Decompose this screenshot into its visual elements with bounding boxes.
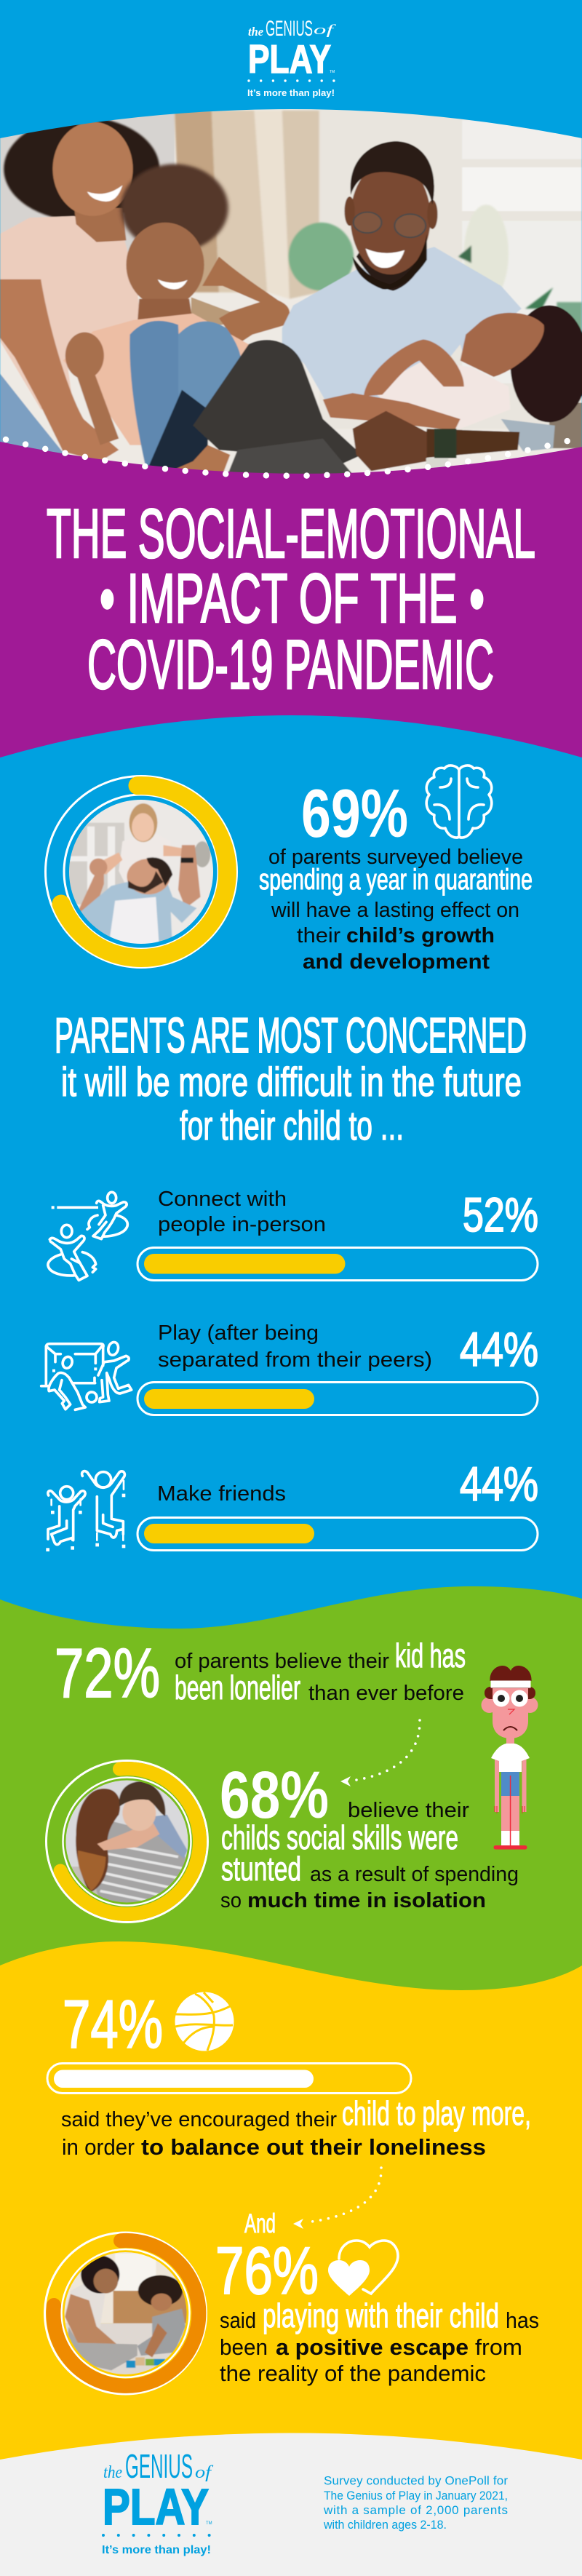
text block: 69% finding: will have a lasting effect on <box>271 899 519 922</box>
heading: parents are most concerned: for their child to ... <box>180 1102 404 1148</box>
logo: The Genius of Play header: the <box>248 25 263 39</box>
text block: 69% finding: their <box>297 924 340 947</box>
text block: 72% finding: kid has <box>395 1637 466 1674</box>
text block: 76% finding: has <box>506 2307 539 2333</box>
text block: 68% finding: stunted <box>221 1850 301 1888</box>
text block: survey note: with children ages 2-18. <box>323 2518 447 2532</box>
row: connect with people in-person: people in-person <box>158 1213 326 1236</box>
row: play after being separated: Play (after being <box>158 1321 319 1345</box>
text block: 74% finding <box>61 2094 531 2160</box>
photo: mother hugging child <box>65 1780 188 1902</box>
logo: The Genius of Play header: GENIUS <box>266 17 313 41</box>
stat: 68%: 68% <box>220 1758 329 1832</box>
text block: 76% finding: said <box>220 2307 256 2333</box>
text block: survey note: The Genius of Play in January 2021, <box>324 2489 508 2503</box>
panel: blue section arc <box>0 715 582 1674</box>
panel: gray footer <box>0 2433 582 2576</box>
text block: 69% finding: and development <box>303 950 490 974</box>
panel: green wave section <box>0 1586 582 2008</box>
row: connect with people in-person <box>137 1188 538 1281</box>
hero photo: laughing family on a sofa <box>0 98 582 488</box>
row: make friends <box>137 1457 538 1550</box>
text block: 68% finding: childs social skills were <box>221 1818 458 1856</box>
stat: 72%: 72% <box>55 1634 160 1712</box>
logo: The Genius of Play header: It’s more than play! <box>247 87 335 98</box>
row: connect with people in-person: Connect with <box>158 1188 287 1211</box>
sofa edge <box>549 403 582 448</box>
logo: The Genius of Play footer <box>102 2447 214 2556</box>
logo: The Genius of Play header <box>247 17 337 98</box>
stat: 76%: 76% <box>215 2234 319 2308</box>
donut chart: 69% with photo of father and child <box>45 776 237 968</box>
progress bar: 52% <box>137 1247 538 1281</box>
logo: The Genius of Play header: of <box>314 23 337 38</box>
panel: purple title band <box>0 442 582 771</box>
text block: 68% finding: much time in isolation <box>247 1889 486 1912</box>
text block: 74% finding: said they’ve encouraged their <box>61 2108 337 2131</box>
photo: mother and daughter with blocks <box>64 2252 186 2374</box>
logo: The Genius of Play header: PLAY <box>248 36 331 82</box>
text block: 74% finding: in order <box>62 2134 135 2160</box>
text block: survey note: with a sample of 2,000 parents <box>323 2503 508 2517</box>
row: play after being separated: 44% <box>460 1322 538 1376</box>
progress bar: 44% <box>137 1518 538 1550</box>
logo: The Genius of Play footer: of <box>195 2463 214 2482</box>
arrow: dotted curve to 76% <box>293 2168 381 2229</box>
arrow: dotted curve to 68% <box>340 1720 420 1786</box>
donut chart: 68% with photo of mother hugging child <box>47 1761 208 1923</box>
text block: 76% finding <box>220 2297 539 2386</box>
text block: 72% finding: of parents believe their <box>175 1650 389 1673</box>
text block: 76% finding: a positive escape <box>276 2334 469 2360</box>
icon: two children jumping <box>46 1471 125 1551</box>
text block: 72% finding: been lonelier <box>175 1669 300 1706</box>
logo: The Genius of Play footer: TM <box>206 2521 212 2526</box>
text block: 69% finding: of parents surveyed believe <box>268 846 523 869</box>
progress bar: 44% <box>137 1383 538 1415</box>
text block: 68% finding <box>220 1799 519 1912</box>
donut chart: 76% with photo of mother playing with daughter <box>45 2233 207 2394</box>
row: play after being separated: separated from their peers) <box>158 1348 432 1372</box>
icon: basketball <box>175 1992 234 2051</box>
logo: The Genius of Play footer: It’s more than play! <box>102 2544 211 2556</box>
text block: 69% finding: child’s growth <box>346 924 495 947</box>
text block: 76% finding: playing with their child <box>263 2297 499 2334</box>
top header band: blue arc <box>0 0 582 138</box>
progress bar: 74% <box>47 2064 411 2093</box>
text block: 72% finding: than ever before <box>308 1682 464 1705</box>
text block: 76% finding: been <box>220 2334 268 2360</box>
dotted border along the photo edge <box>6 440 570 476</box>
logo: The Genius of Play footer: PLAY <box>103 2478 209 2535</box>
panel: yellow wave section <box>0 1941 582 2474</box>
label: And: And <box>244 2209 276 2238</box>
row: play after being separated <box>137 1321 538 1415</box>
text block: 76% finding: the reality of the pandemic <box>220 2361 486 2386</box>
stat: 74%: 74% <box>63 1986 163 2062</box>
stat: 69%: 69% <box>301 775 408 851</box>
logo: The Genius of Play footer: GENIUS <box>125 2447 193 2485</box>
text block: 68% finding: so <box>220 1889 242 1912</box>
row: make friends: 44% <box>460 1457 538 1511</box>
text block: survey note <box>323 2474 508 2532</box>
row: make friends: Make friends <box>157 1482 286 1506</box>
logo: The Genius of Play header: TM <box>330 70 335 74</box>
icon: children sliding <box>48 1192 127 1280</box>
heading: parents are most concerned <box>55 1008 527 1148</box>
title <box>47 495 535 704</box>
text block: 74% finding: to balance out their loneliness <box>141 2134 486 2160</box>
icon: two hearts <box>328 2241 398 2296</box>
text block: 72% finding <box>175 1637 466 1706</box>
logo: The Genius of Play footer: the <box>103 2463 122 2482</box>
icon: children playing soccer at goal <box>41 1341 132 1410</box>
text block: 68% finding: believe their <box>348 1799 469 1822</box>
character: sad boy with headband <box>482 1666 538 1850</box>
section background: blue survey panel <box>0 655 582 1674</box>
text block: 69% finding <box>259 846 533 974</box>
text block: 68% finding: as a result of spending <box>310 1863 519 1886</box>
text block: survey note: Survey conducted by OnePoll for <box>324 2474 508 2487</box>
photo: father carrying child on shoulders <box>69 800 213 944</box>
text block: 76% finding: from <box>475 2334 522 2360</box>
row: connect with people in-person: 52% <box>463 1188 538 1241</box>
icon: brain <box>426 766 492 838</box>
